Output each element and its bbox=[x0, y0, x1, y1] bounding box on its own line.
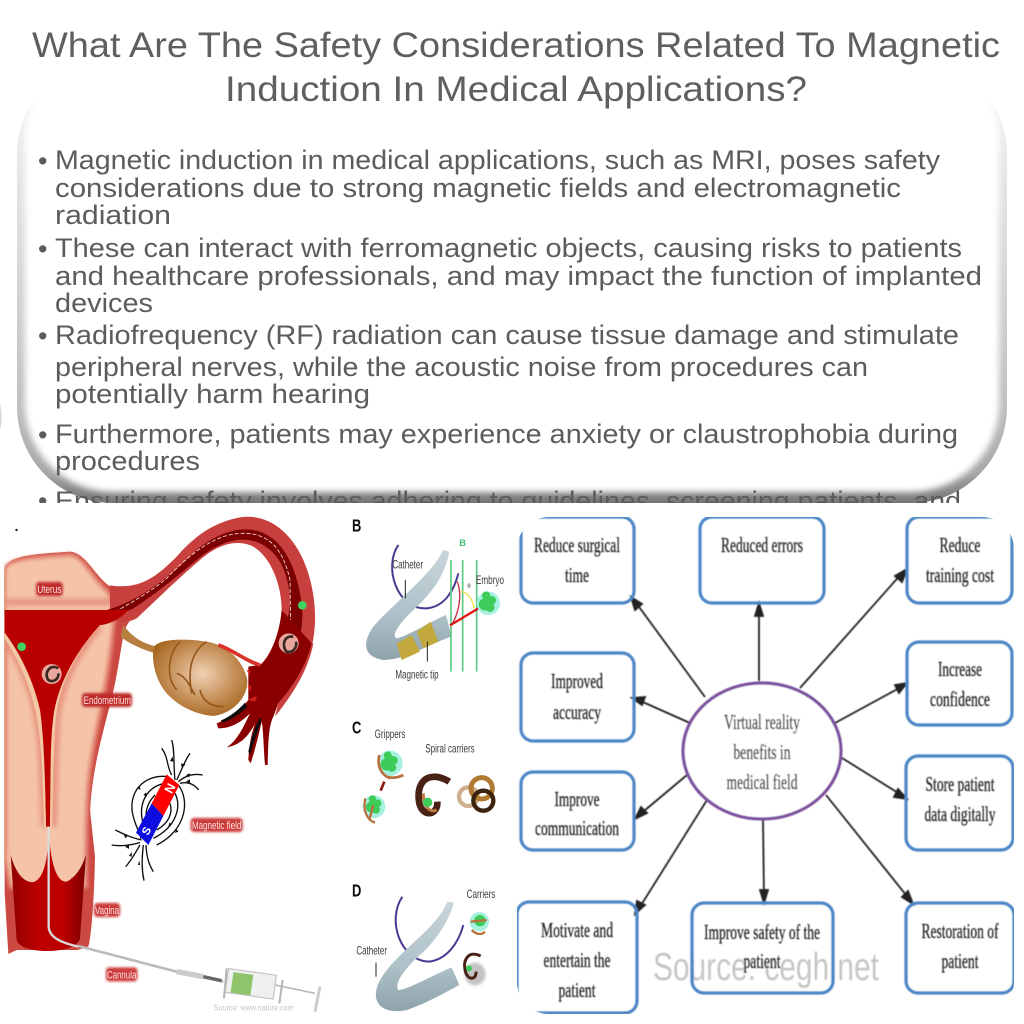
text block: bullet list: peripheral nerves, while the acoustic noise from procedures can bbox=[55, 352, 868, 382]
text block: bullet list: procedures bbox=[55, 446, 200, 476]
illustration: magnetic embryo delivery in uterus bbox=[3, 517, 320, 1013]
box labels: time bbox=[565, 563, 589, 587]
text block: bullet list: • bbox=[38, 486, 47, 516]
box labels: medical field bbox=[726, 770, 798, 794]
ovary bbox=[121, 625, 157, 653]
panel D: catheter with carriers: D bbox=[352, 881, 361, 901]
panel B: catheter and magnetic tip: B bbox=[352, 516, 361, 536]
box labels: confidence bbox=[930, 687, 990, 711]
text block: bullet list: and healthcare professionals, and may impact the function of implanted bbox=[55, 261, 982, 291]
label: Cannula bbox=[106, 967, 137, 981]
box labels: Reduced errors bbox=[721, 533, 803, 557]
text block: bullet list: considerations due to strong magnetic fields and electromagnetic bbox=[55, 173, 901, 203]
title bbox=[32, 26, 1000, 109]
panel B: catheter and magnetic tip: Magnetic tip bbox=[395, 668, 439, 681]
text block: bullet list: Radiofrequency (RF) radiation can cause tissue damage and stimulate bbox=[55, 320, 959, 350]
text block: bullet list: potentially harm hearing bbox=[55, 379, 370, 409]
box labels: Virtual reality bbox=[724, 710, 800, 734]
box labels: Improved bbox=[551, 669, 603, 693]
boxes bbox=[517, 517, 1014, 1013]
watermark: Source: cegh.net bbox=[653, 946, 879, 989]
label: Magnetic field bbox=[191, 818, 243, 832]
box labels: Motivate and bbox=[541, 918, 613, 942]
text block: bullet list: • bbox=[38, 146, 47, 176]
magnet with field lines: N bbox=[162, 781, 179, 796]
box labels: Improve bbox=[554, 787, 600, 811]
panel D: catheter with carriers: Catheter bbox=[356, 945, 387, 958]
panel D: catheter with carriers: Carriers bbox=[467, 888, 495, 901]
text block: bullet list bbox=[38, 145, 982, 516]
box labels: benefits in bbox=[734, 740, 791, 764]
ellipse bbox=[683, 683, 841, 819]
title: What Are The Safety Considerations Related To Magnetic bbox=[32, 26, 1000, 65]
panel: text card bbox=[17, 50, 1007, 503]
illustration: panels B, C, D bbox=[352, 516, 504, 1011]
tube end and fimbriae bbox=[217, 610, 312, 765]
left edge artefact bbox=[0, 404, 2, 430]
label: Magnetic field: Magnetic field bbox=[192, 820, 241, 832]
box labels bbox=[534, 533, 999, 1002]
cannula and syringe bbox=[49, 827, 320, 1012]
text block: bullet list: • bbox=[38, 321, 47, 351]
label: Vagina bbox=[94, 903, 120, 917]
text block: bullet list: • bbox=[38, 420, 47, 450]
source credit: Source: www.nature.com bbox=[214, 1004, 294, 1013]
box labels: accuracy bbox=[553, 700, 601, 724]
panel B: catheter and magnetic tip bbox=[352, 516, 504, 681]
arrows bbox=[631, 569, 913, 914]
panel B: catheter and magnetic tip: Catheter bbox=[392, 559, 423, 572]
text block: bullet list: Magnetic induction in medical applications, such as MRI, poses safety bbox=[55, 145, 941, 175]
uterine cavity bbox=[5, 610, 128, 827]
label: Endometrium bbox=[82, 693, 132, 707]
vagina bbox=[10, 842, 86, 951]
label: Uterus: Uterus bbox=[37, 584, 62, 596]
box labels: patient bbox=[744, 949, 781, 973]
box labels: entertain the bbox=[544, 948, 610, 972]
panel C: grippers and spiral carriers: Grippers bbox=[375, 728, 405, 741]
label: Endometrium: Endometrium bbox=[84, 695, 131, 707]
text block: bullet list: These can interact with ferromagnetic objects, causing risks to patients bbox=[55, 233, 962, 263]
panel C: grippers and spiral carriers bbox=[352, 717, 493, 823]
corner speck bbox=[15, 529, 18, 531]
panel B: catheter and magnetic tip: θ bbox=[467, 584, 471, 590]
uterus body bbox=[4, 552, 130, 954]
text block: bullet list: devices bbox=[55, 288, 153, 318]
box labels: Reduce surgical bbox=[534, 533, 620, 557]
box labels: Increase bbox=[938, 657, 982, 681]
embryo icons bbox=[17, 642, 26, 651]
box labels: patient bbox=[558, 978, 596, 1002]
label: Cannula: Cannula bbox=[107, 969, 137, 981]
text block: bullet list: Ensuring safety involves adhering to guidelines, screening patients, and bbox=[55, 486, 961, 516]
label: Uterus bbox=[36, 582, 63, 596]
text block: bullet list: Furthermore, patients may experience anxiety or claustrophobia during bbox=[55, 419, 958, 449]
magnet with field lines bbox=[112, 740, 203, 881]
box labels: Reduce bbox=[940, 533, 980, 557]
panel C: grippers and spiral carriers: C bbox=[352, 717, 361, 737]
panel B: catheter and magnetic tip: Embryo bbox=[476, 574, 504, 587]
label: Vagina: Vagina bbox=[95, 905, 120, 917]
panel B: catheter and magnetic tip: B bbox=[459, 538, 466, 548]
box labels: patient bbox=[942, 949, 979, 973]
text block: bullet list: radiation bbox=[55, 200, 171, 230]
panel C: grippers and spiral carriers: Spiral carriers bbox=[425, 742, 475, 755]
title: Induction In Medical Applications? bbox=[225, 70, 807, 109]
box labels: communication bbox=[535, 816, 619, 840]
text block: bullet list: • bbox=[38, 234, 47, 264]
flowchart: virtual reality benefits bbox=[517, 517, 1014, 1013]
image backdrop bbox=[0, 503, 1024, 1024]
magnet with field lines: S bbox=[140, 825, 154, 837]
fallopian tube bbox=[110, 517, 315, 700]
uterus shading bbox=[3, 602, 120, 857]
panel D: catheter with carriers bbox=[352, 881, 495, 1011]
box labels: Improve safety of the bbox=[704, 920, 820, 944]
